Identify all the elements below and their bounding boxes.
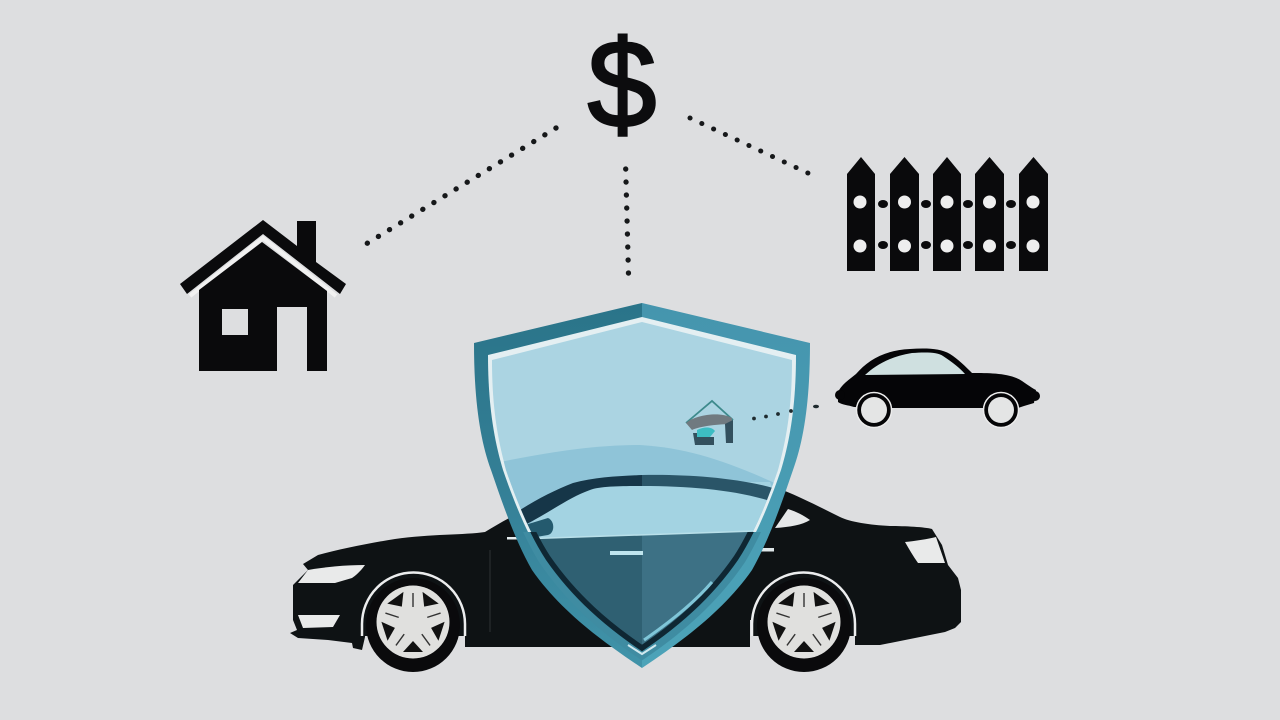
door seam bbox=[489, 550, 491, 632]
shield bbox=[470, 300, 810, 668]
door window line bbox=[520, 531, 755, 539]
car window through shield bbox=[532, 482, 772, 538]
shield interior bbox=[492, 322, 792, 645]
icon: house bbox=[180, 220, 346, 371]
icon: small car bbox=[835, 349, 1040, 428]
icon: dollar sign: $ bbox=[588, 16, 656, 154]
shield glass bbox=[492, 322, 792, 524]
car mirror through shield bbox=[528, 518, 554, 536]
large car rear arch bbox=[752, 572, 855, 636]
illustration canvas bbox=[180, 34, 1048, 672]
shield lower inner dark edge bbox=[530, 532, 754, 652]
small car front wheel bbox=[856, 392, 892, 428]
dotted connector: small house to small car bbox=[752, 405, 819, 420]
small house icon on shield bbox=[686, 401, 733, 445]
shield outer rim left bbox=[474, 303, 642, 668]
shield lower highlight bbox=[644, 582, 712, 640]
small car rear bumper bbox=[1030, 391, 1040, 401]
rear door handle bbox=[746, 548, 774, 552]
car door left through shield bbox=[540, 536, 642, 645]
front door handle stub bbox=[507, 537, 521, 540]
front lower vent bbox=[298, 615, 340, 628]
small car front bumper bbox=[835, 390, 845, 400]
car roof through shield: right bbox=[642, 475, 773, 501]
shield tip highlight bbox=[628, 645, 656, 654]
shield lower rim cover bbox=[528, 532, 761, 660]
car roof through shield: left bbox=[517, 475, 642, 525]
small car body bbox=[838, 349, 1036, 408]
fence connectors bbox=[878, 200, 1016, 249]
small car rear wheel bbox=[984, 392, 1018, 428]
fence holes bbox=[854, 196, 1040, 252]
front headlight bbox=[298, 565, 365, 583]
glass hill bbox=[504, 445, 774, 532]
dotted connector: dollar to house bbox=[366, 128, 556, 244]
fence pickets bbox=[847, 157, 1048, 271]
large car front arch bbox=[362, 572, 465, 636]
rear side window bbox=[775, 509, 810, 528]
large car rear wheel bbox=[757, 578, 851, 672]
dotted connector: dollar to shield bbox=[626, 169, 628, 275]
large car bbox=[290, 474, 961, 672]
rear light bbox=[905, 537, 945, 563]
shield outer rim right bbox=[642, 303, 810, 668]
large car front wheel bbox=[366, 578, 460, 672]
large car body bbox=[290, 474, 961, 650]
shield white edge bbox=[488, 317, 796, 655]
small car window bbox=[865, 352, 965, 375]
dotted connector: dollar to fence bbox=[690, 118, 810, 174]
door handle through shield bbox=[610, 551, 643, 555]
icon: fence bbox=[847, 157, 1048, 271]
car door right through shield bbox=[642, 531, 754, 645]
